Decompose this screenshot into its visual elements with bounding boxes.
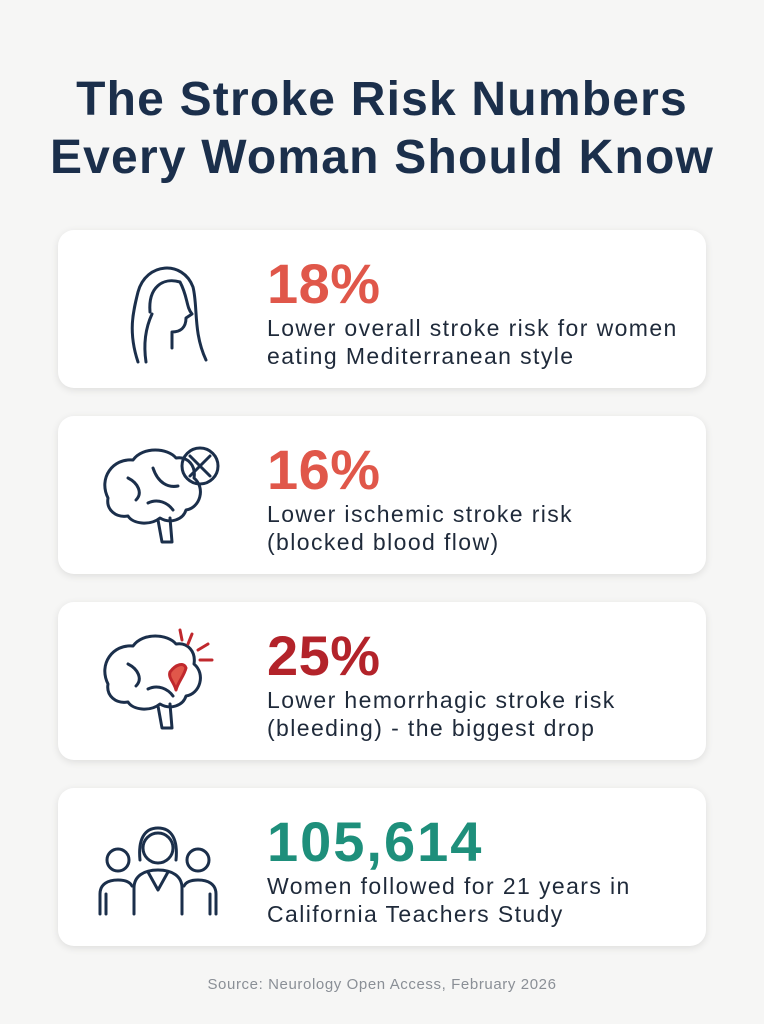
title: Every Woman Should Know bbox=[50, 131, 714, 184]
description: (bleeding) - the biggest drop bbox=[267, 715, 595, 741]
description: Women followed for 21 years in bbox=[267, 873, 631, 899]
stat: 16% bbox=[267, 438, 381, 501]
description bbox=[267, 873, 631, 927]
description bbox=[267, 687, 616, 741]
card: 105,614 bbox=[58, 788, 706, 946]
description: Lower overall stroke risk for women bbox=[267, 315, 678, 341]
description: Lower hemorrhagic stroke risk bbox=[267, 687, 616, 713]
stat: 105,614 bbox=[267, 810, 483, 873]
card: 18% bbox=[58, 230, 706, 388]
stat: 25% bbox=[267, 624, 381, 687]
stat: 18% bbox=[267, 252, 381, 315]
icon: woman profile bbox=[130, 266, 208, 364]
description: Lower ischemic stroke risk bbox=[267, 501, 573, 527]
card: 25% bbox=[58, 602, 706, 760]
icon: three women bbox=[98, 826, 218, 916]
card: 16% bbox=[58, 416, 706, 574]
icon: brain with X bbox=[103, 446, 220, 544]
description: (blocked blood flow) bbox=[267, 529, 500, 555]
icon: brain with bleed bbox=[103, 628, 214, 730]
title bbox=[50, 73, 714, 184]
source: Source: Neurology Open Access, February 2026 bbox=[207, 976, 557, 993]
description: eating Mediterranean style bbox=[267, 343, 574, 369]
description: California Teachers Study bbox=[267, 901, 564, 927]
title: The Stroke Risk Numbers bbox=[76, 73, 688, 126]
description bbox=[267, 501, 573, 555]
description bbox=[267, 315, 678, 369]
